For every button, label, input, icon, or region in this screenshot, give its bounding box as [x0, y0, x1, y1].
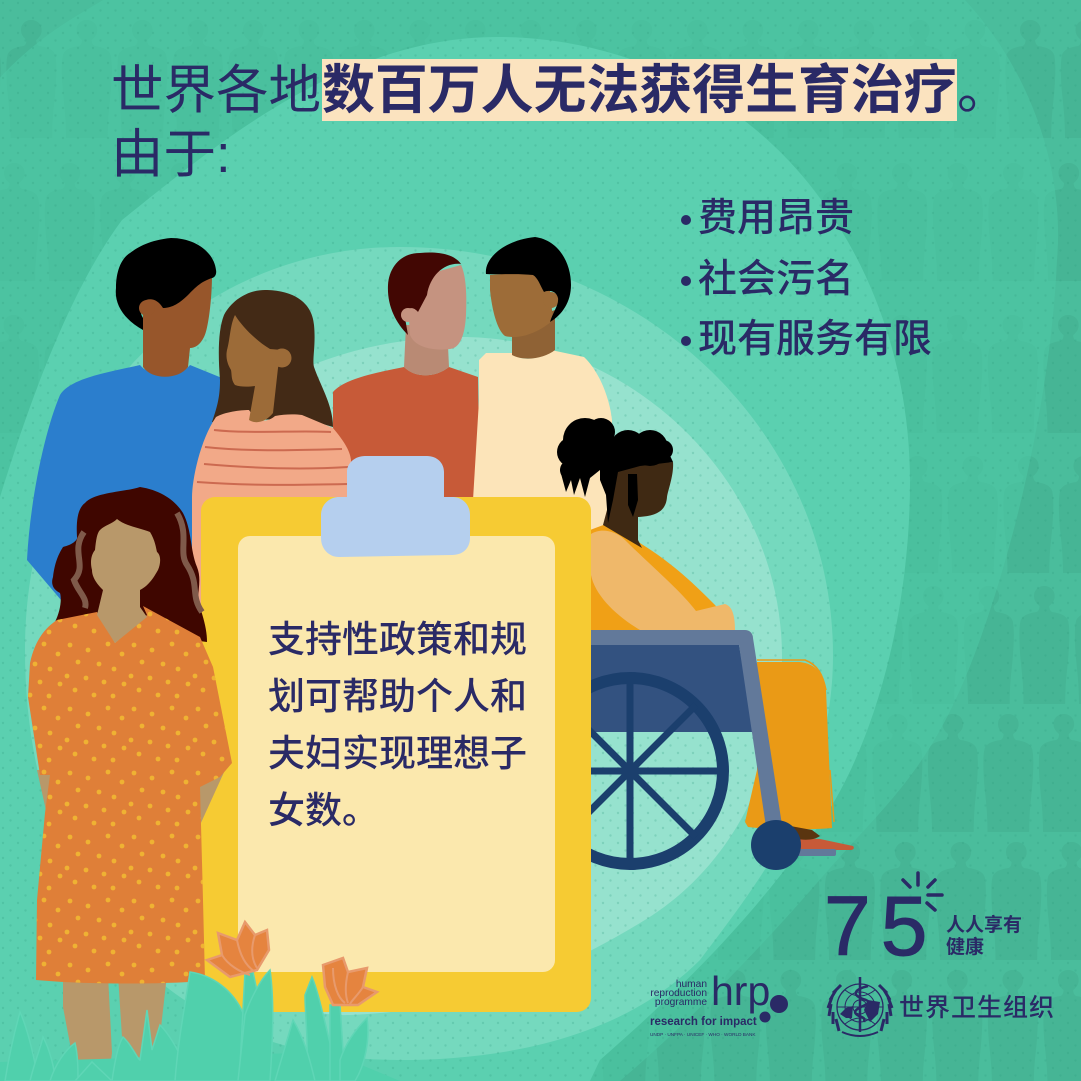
bullet list: 费用昂贵 [698, 197, 854, 240]
title [111, 59, 1010, 184]
logo: HRP: programme [655, 997, 707, 1008]
clipboard clip [321, 456, 470, 557]
person: man in blue sweater [27, 238, 222, 610]
logo: HRP [650, 968, 788, 1037]
seat back [591, 645, 754, 732]
wheelchair frame [591, 630, 782, 827]
logo: WHO 75 years [824, 873, 1022, 973]
hair highlights [74, 513, 202, 612]
hair [52, 487, 207, 642]
clipboard paper [238, 536, 555, 972]
title: 由于: [111, 125, 231, 184]
logo: HRP: human [676, 979, 707, 990]
card text: 支持性政策和规 [268, 619, 527, 660]
title: 世界各地 [111, 61, 321, 120]
card text [268, 619, 527, 831]
wheelchair rear wheel [537, 678, 723, 864]
person: man in cream shirt [473, 237, 612, 560]
trousers [745, 662, 832, 829]
clipboard card [201, 456, 591, 1012]
bullet list: 现有服务有限 [698, 318, 932, 361]
title: 。 [957, 61, 1010, 120]
sweater stripes [197, 430, 348, 485]
logo: WHO emblem [828, 977, 892, 1036]
dress [28, 606, 232, 984]
grass [0, 970, 400, 1081]
card text: 夫妇实现理想子 [268, 733, 527, 774]
logo: HRP: UNDP · UNFPA · UNICEF · WHO · WORLD BANK [650, 1032, 756, 1037]
icon: flower right [323, 958, 377, 1005]
person: woman in orange dress [28, 487, 232, 1081]
icon: flower left [207, 922, 269, 977]
dress [590, 524, 735, 630]
title: 数百万人无法获得生育治疗 [322, 61, 957, 120]
face and neck [603, 462, 673, 548]
logo: WHO 75 years: 75 [824, 879, 937, 973]
hair [557, 418, 673, 523]
arms [37, 770, 225, 825]
logo: WHO 75 years: 健康 [946, 935, 984, 958]
bullet list: 社会污名 [698, 258, 854, 301]
logo: HRP: reproduction [650, 988, 707, 999]
card text: 女数。 [268, 790, 379, 831]
WHO name: 世界卫生组织 [899, 994, 1055, 1022]
front wheel [751, 820, 801, 870]
legs [63, 975, 167, 1081]
logo: HRP: hrp [711, 968, 770, 1014]
person: woman in striped top [192, 290, 351, 620]
face and neck [91, 519, 160, 643]
arm [591, 531, 735, 630]
person: woman in wheelchair [537, 418, 854, 870]
logo: WHO 75 years: 人人享有 [946, 914, 1022, 936]
clipboard board [201, 497, 591, 1012]
icon: sun rays [903, 873, 942, 910]
shoe [795, 838, 854, 850]
bullet list [681, 197, 932, 361]
person: man in red sweater [333, 252, 480, 500]
card text: 划可帮助个人和 [268, 676, 527, 717]
foot plate [795, 849, 836, 856]
logo: HRP: research for impact [650, 1016, 757, 1028]
title highlight box [322, 59, 957, 121]
